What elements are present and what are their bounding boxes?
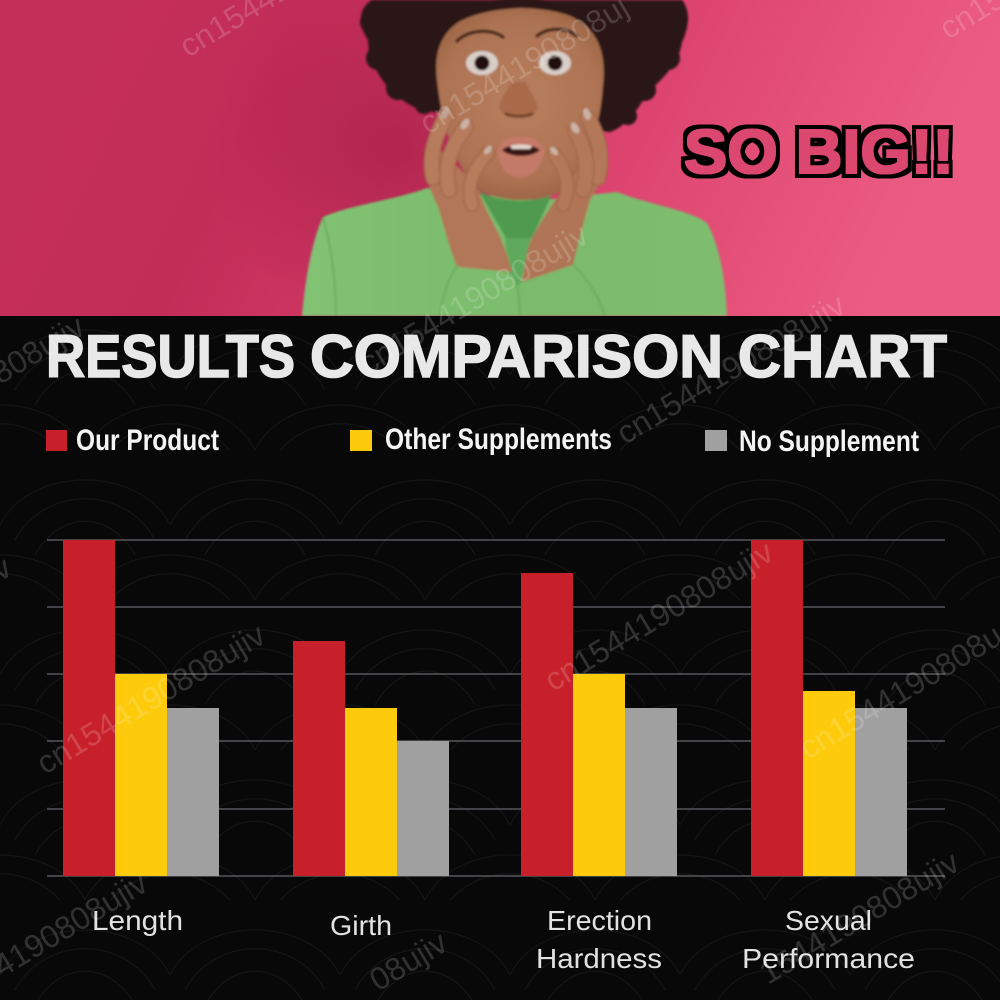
bar chart: [47, 540, 945, 876]
bars: length: [63, 540, 219, 876]
hair: [360, 0, 688, 132]
hairline: [440, 0, 600, 42]
axis labels: Performance: [742, 943, 915, 974]
legend: no supplement: No Supplement: [739, 425, 919, 458]
face: [436, 7, 604, 200]
cuff: left: [448, 266, 516, 316]
axis labels: Sexual: [785, 905, 872, 936]
bars: sexual performance: [751, 540, 907, 876]
axis labels: Hardness: [536, 943, 662, 974]
illustration: surprised woman: [302, 0, 727, 316]
title: CHART: [738, 323, 947, 390]
legend: our product: Our Product: [76, 424, 219, 457]
sleeve folds: [323, 217, 605, 316]
axis labels: Length: [92, 905, 183, 936]
panel: chart background: [0, 316, 1000, 1000]
right hand: [522, 107, 607, 282]
axis labels: [92, 905, 915, 974]
watermarks: 1544190808ujiv: [753, 844, 965, 991]
watermarks: 08ujiv: [363, 924, 453, 998]
watermarks: cn1544190808ujiv: [610, 286, 851, 451]
title: [46, 323, 947, 390]
bars: girth: [293, 641, 449, 876]
axis labels: Girth: [330, 910, 392, 941]
sweater centre: [505, 232, 532, 285]
title: COMPARISON: [310, 323, 723, 390]
sweater body: [302, 188, 727, 316]
legend: other supplements: Other Supplements: [385, 423, 612, 456]
eyebrows: [457, 29, 577, 41]
turtleneck: [478, 190, 552, 238]
legend: [46, 423, 919, 458]
title: RESULTS: [46, 323, 295, 390]
callout: SO BIG: SO BIG!!: [684, 118, 954, 187]
watermarks: cn1544190808ujiv: [538, 533, 779, 698]
eye: left: [466, 51, 498, 75]
panel: photo banner: [0, 0, 1000, 316]
legend: our product: [46, 424, 219, 457]
cuff: right: [521, 265, 605, 316]
axis labels: Erection: [547, 905, 652, 936]
watermarks: cn1544190808ujiv: [353, 216, 594, 381]
bars: erection hardness: [521, 573, 677, 876]
left hand: [425, 106, 512, 272]
watermarks: cn1544190808ujiv: [30, 616, 271, 781]
nose: [500, 82, 537, 118]
mouth: [497, 137, 545, 177]
eye: right: [539, 51, 571, 75]
